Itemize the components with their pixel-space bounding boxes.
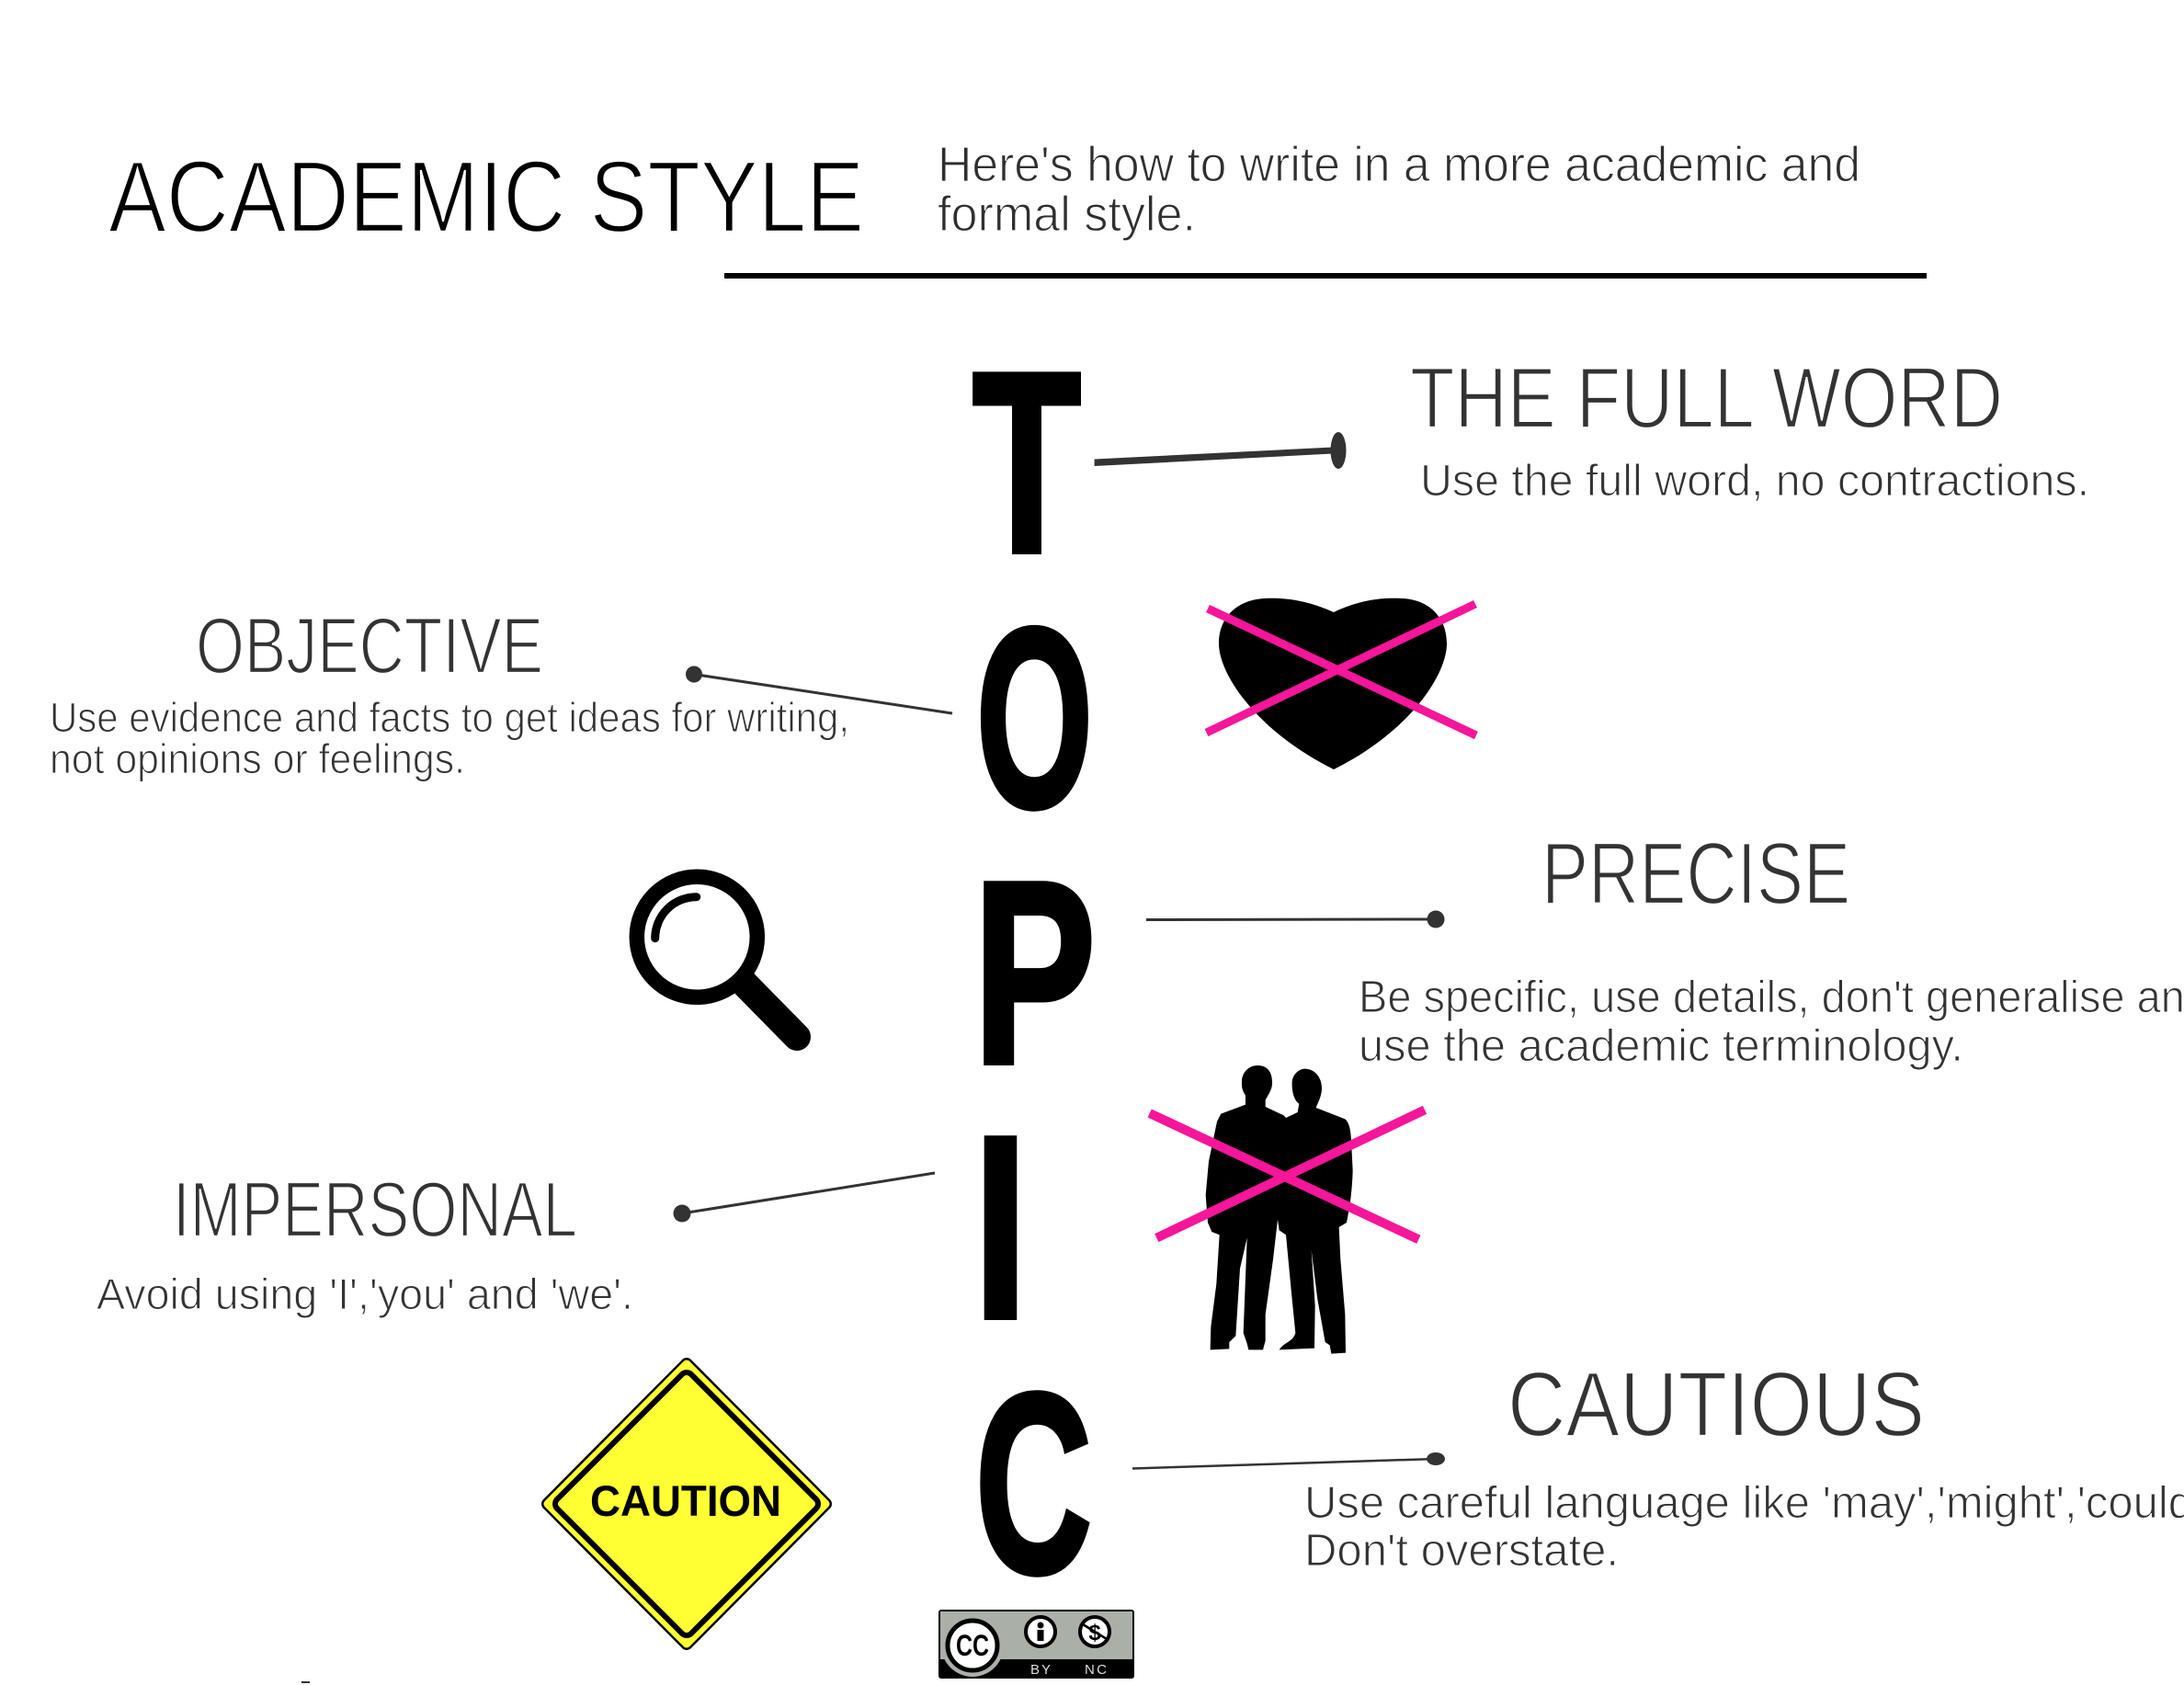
icon: caution sign: CAUTION: [590, 1476, 781, 1525]
text: the full word: Use the full word, no contractions.: [1420, 457, 2089, 506]
text: cautious: Don't overstate.: [1304, 1526, 1619, 1576]
icon: crossed-out people: [1150, 1065, 1425, 1354]
panel: precise: [1146, 825, 2184, 1071]
text: precise: [1359, 973, 2184, 1071]
icon: caution sign: [548, 1364, 825, 1644]
heading: objective: OBJECTIVE: [196, 602, 543, 690]
icon: creative commons badge: CC: [956, 1629, 989, 1662]
text: precise: use the academic terminology.: [1359, 1021, 1963, 1071]
connector arrow: O to objective: [686, 666, 952, 713]
intro text: formal style.: [938, 187, 1196, 242]
connector arrow: T to full word: [1095, 432, 1346, 469]
heading: precise: PRECISE: [1541, 825, 1850, 923]
icon: creative commons badge: BY: [1030, 1662, 1051, 1678]
title: ACADEMIC STYLE: [108, 141, 864, 254]
panel: cautious: [1132, 1353, 2184, 1576]
heading: impersonal: IMPERSONAL: [173, 1167, 577, 1254]
text: objective: not opinions or feelings.: [50, 735, 465, 782]
connector arrow: C to cautious: [1132, 1452, 1445, 1469]
letter P: P: [973, 826, 1096, 1118]
panel: impersonal: [97, 1167, 935, 1318]
panel: objective: [50, 602, 952, 782]
icon: creative commons badge: [938, 1610, 1134, 1679]
letter C: C: [975, 1341, 1092, 1627]
text: cautious: [1304, 1478, 2184, 1576]
connector arrow: P to precise: [1146, 910, 1445, 928]
text: impersonal: Avoid using 'I','you' and 'we'.: [97, 1269, 633, 1318]
intro text: [938, 137, 1860, 242]
connector arrow: I to impersonal: [673, 1173, 935, 1223]
icon: magnifying glass: [637, 877, 797, 1037]
icon: creative commons badge: NC: [1085, 1662, 1107, 1678]
letter O: O: [976, 576, 1093, 861]
icon: crossed-out heart: [1206, 598, 1476, 769]
heading rule: [724, 273, 1927, 279]
intro text: Here's how to write in a more academic and: [938, 137, 1860, 192]
icon: creative commons badge: $: [1088, 1621, 1101, 1645]
letter T: T: [973, 318, 1081, 606]
heading: cautious: CAUTIOUS: [1507, 1353, 1925, 1456]
panel: the full word: [1095, 349, 2089, 506]
text: objective: [50, 694, 849, 782]
letter I: I: [973, 1082, 1028, 1373]
heading: the full word: THE FULL WORD: [1410, 349, 2003, 446]
text: objective: Use evidence and facts to get ideas for writing,: [50, 694, 849, 741]
